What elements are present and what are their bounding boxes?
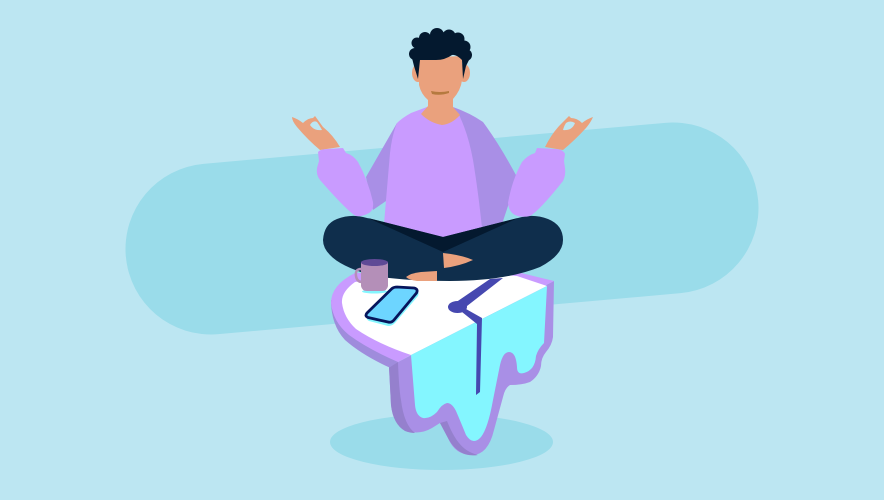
mug shadow [362, 290, 387, 294]
phone glow [367, 288, 419, 326]
legs [323, 216, 563, 281]
table rim underside [331, 300, 398, 368]
left ear [412, 64, 424, 82]
darker left drip shading [389, 362, 415, 433]
background pill shape [211, 208, 673, 249]
phone [366, 287, 419, 326]
crack [448, 278, 503, 395]
coffee mug [356, 259, 388, 294]
back foot [406, 271, 437, 281]
phone body [366, 287, 417, 322]
table top [342, 270, 547, 355]
table rim top [331, 272, 554, 362]
front foot [443, 253, 473, 268]
right hand [545, 116, 593, 150]
right sleeve [508, 148, 565, 217]
person [292, 28, 593, 281]
ground shadow [330, 414, 553, 470]
mug body [361, 262, 388, 291]
table side and drips [389, 281, 554, 455]
left sleeve [317, 148, 373, 216]
torso [384, 107, 482, 238]
hair [409, 28, 472, 79]
left hand [292, 116, 340, 150]
back arm shading left [366, 123, 400, 210]
back arm shading right [453, 107, 517, 228]
mug opening [361, 259, 388, 266]
right ear [458, 64, 470, 82]
smile [431, 91, 449, 95]
melting table [331, 270, 554, 455]
darker middle drip shading [440, 421, 478, 455]
dark shadow between legs [368, 218, 518, 252]
mug handle [356, 269, 362, 282]
cyan melting front [411, 286, 547, 441]
head and neck [419, 56, 462, 125]
